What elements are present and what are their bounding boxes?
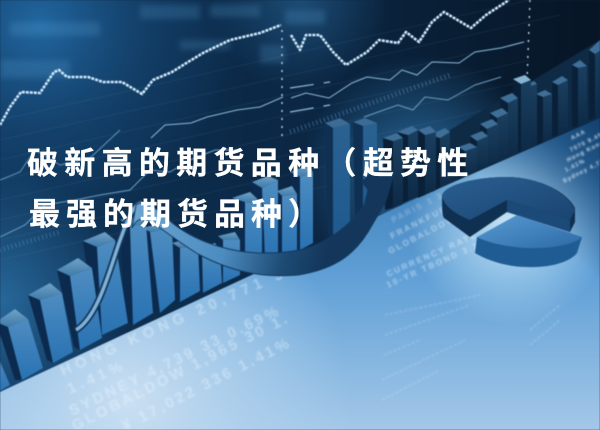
bar (120, 214, 153, 325)
title line 1: 破新高的期货品种（超势性 (27, 138, 475, 183)
ticker text on floor, right: GLOBALDOW (386, 213, 457, 256)
bar (353, 118, 377, 226)
dark bar (572, 60, 587, 128)
ticker text on floor, left: SYDNEY 4,739 33 0.69% (66, 302, 284, 420)
dark bar (536, 90, 552, 145)
bar chart: back dark bars (383, 40, 600, 210)
bar (277, 186, 297, 256)
ticker text, top right: 1.41% (564, 158, 587, 174)
bar (143, 222, 175, 313)
dark bar (589, 40, 600, 120)
bar (218, 232, 240, 283)
dark bar (430, 128, 450, 192)
ticker text on floor, left: 1.41% (65, 357, 129, 398)
bar (172, 238, 200, 302)
ticker text on floor, left: HONG KONG 20,771 3 (58, 264, 290, 380)
trend lines (0, 0, 530, 250)
bar (325, 118, 350, 238)
dark bar (397, 126, 418, 205)
bar (83, 232, 128, 335)
dark bar (418, 126, 436, 198)
ticker text on floor, right: 10-YR TBOND 3.37 (385, 237, 487, 290)
dark bar (513, 75, 531, 154)
dark bar (458, 143, 477, 179)
bar chart: middle bars (232, 118, 377, 272)
dark bar (470, 131, 488, 174)
pie chart (442, 177, 582, 267)
bar (0, 309, 43, 380)
ticker text on floor, right: FRANKFURT (388, 200, 456, 241)
ticker text on floor, right (385, 190, 487, 290)
bar (28, 283, 73, 363)
bar chart: front bars (0, 214, 240, 392)
dark bar (528, 81, 537, 149)
rising arrow ribbon (76, 170, 395, 330)
pie: large piece (442, 177, 575, 237)
ticker text on floor, right: CURRENCY RATE (385, 229, 479, 279)
bar (197, 243, 222, 293)
pie: pulled slice (475, 215, 582, 267)
ticker text on floor, right: PARIS 3 3 (389, 190, 445, 225)
dark bar (480, 119, 498, 169)
bar (57, 258, 102, 350)
dark bar (383, 133, 403, 210)
ticker text, top right (562, 129, 600, 185)
light floor plane (0, 113, 600, 430)
ticker text, top right: AAA (570, 129, 587, 142)
dark bar (490, 108, 508, 165)
blurred ticker blocks at top (0, 5, 325, 78)
title line 2: 最强的期货品种） (29, 189, 325, 234)
grid lines (0, 0, 560, 260)
dark bar (500, 93, 518, 160)
faint ticker columns bottom right (382, 295, 560, 400)
bar (0, 357, 10, 392)
ticker text on floor, left (58, 264, 295, 430)
bar (232, 192, 262, 272)
dark bar (552, 76, 568, 137)
bar (290, 165, 313, 250)
bar (252, 176, 278, 258)
